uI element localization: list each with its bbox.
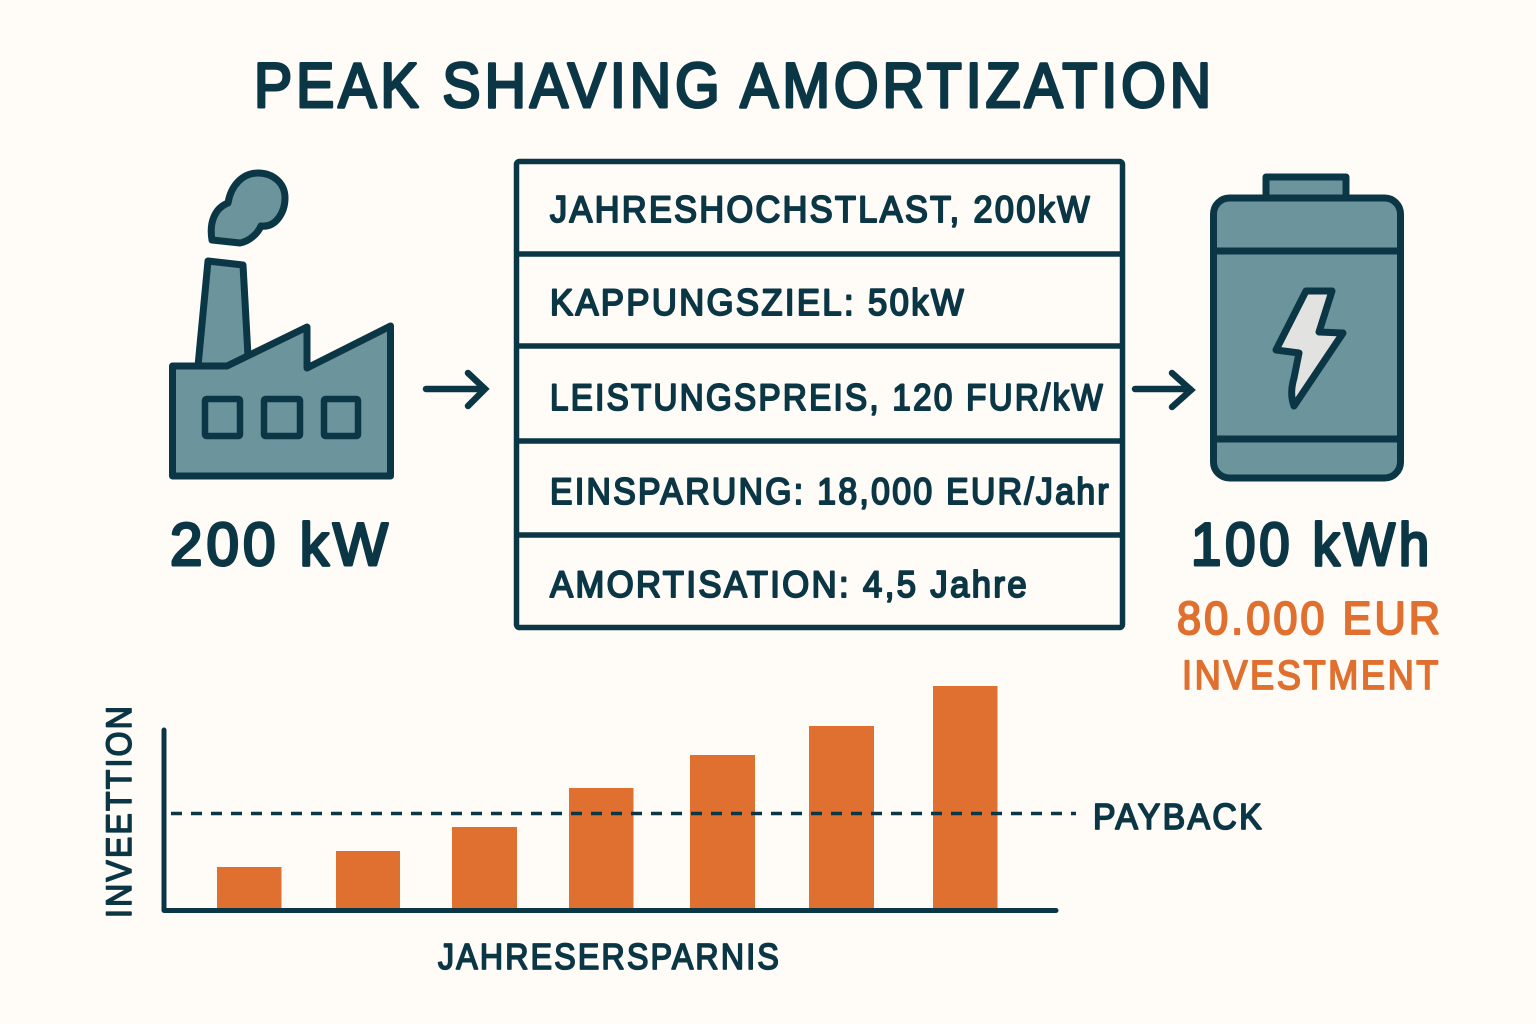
table frame and dividers [516,162,1123,628]
icon: battery [1214,177,1400,478]
arrow: table to battery [1135,373,1191,407]
label: investment: INVESTMENT [1182,652,1441,698]
row: annual peak load: JAHRESHOCHSTLAST, 200kW [550,189,1092,230]
icon: lightning bolt [1276,291,1343,406]
icon: factory windows [205,399,358,436]
row: capping target: KAPPUNGSZIEL: 50kW [550,282,966,323]
icon: smoke cloud [211,173,285,243]
panel: parameter table [516,162,1123,628]
row: amortization: AMORTISATION: 4,5 Jahre [550,564,1029,605]
icon: factory [172,173,390,476]
label: investment amount: 80.000 EUR [1177,592,1443,644]
label: battery capacity: 100 kWh [1191,511,1433,578]
icon: battery body [1214,198,1400,478]
bar chart: payback [100,686,1264,977]
title: PEAK SHAVING AMORTIZATION [254,51,1215,121]
bars [217,686,998,909]
label: y axis: INVEETTION [100,704,139,918]
battery bands [1214,251,1400,439]
row: demand charge: LEISTUNGSPREIS, 120 FUR/kW [550,377,1105,418]
label: x axis: JAHRESERSPARNIS [438,936,781,977]
icon: battery terminal [1266,177,1346,198]
icon: chimney [198,261,248,366]
row: savings: EINSPARUNG: 18,000 EUR/Jahr [550,471,1111,512]
label: peak load: 200 kW [170,511,392,578]
icon: factory building [172,326,390,476]
chart axes [164,730,1056,910]
payback dashed line [171,812,1076,815]
arrow: factory to table [426,373,485,406]
label: payback: PAYBACK [1093,796,1264,837]
